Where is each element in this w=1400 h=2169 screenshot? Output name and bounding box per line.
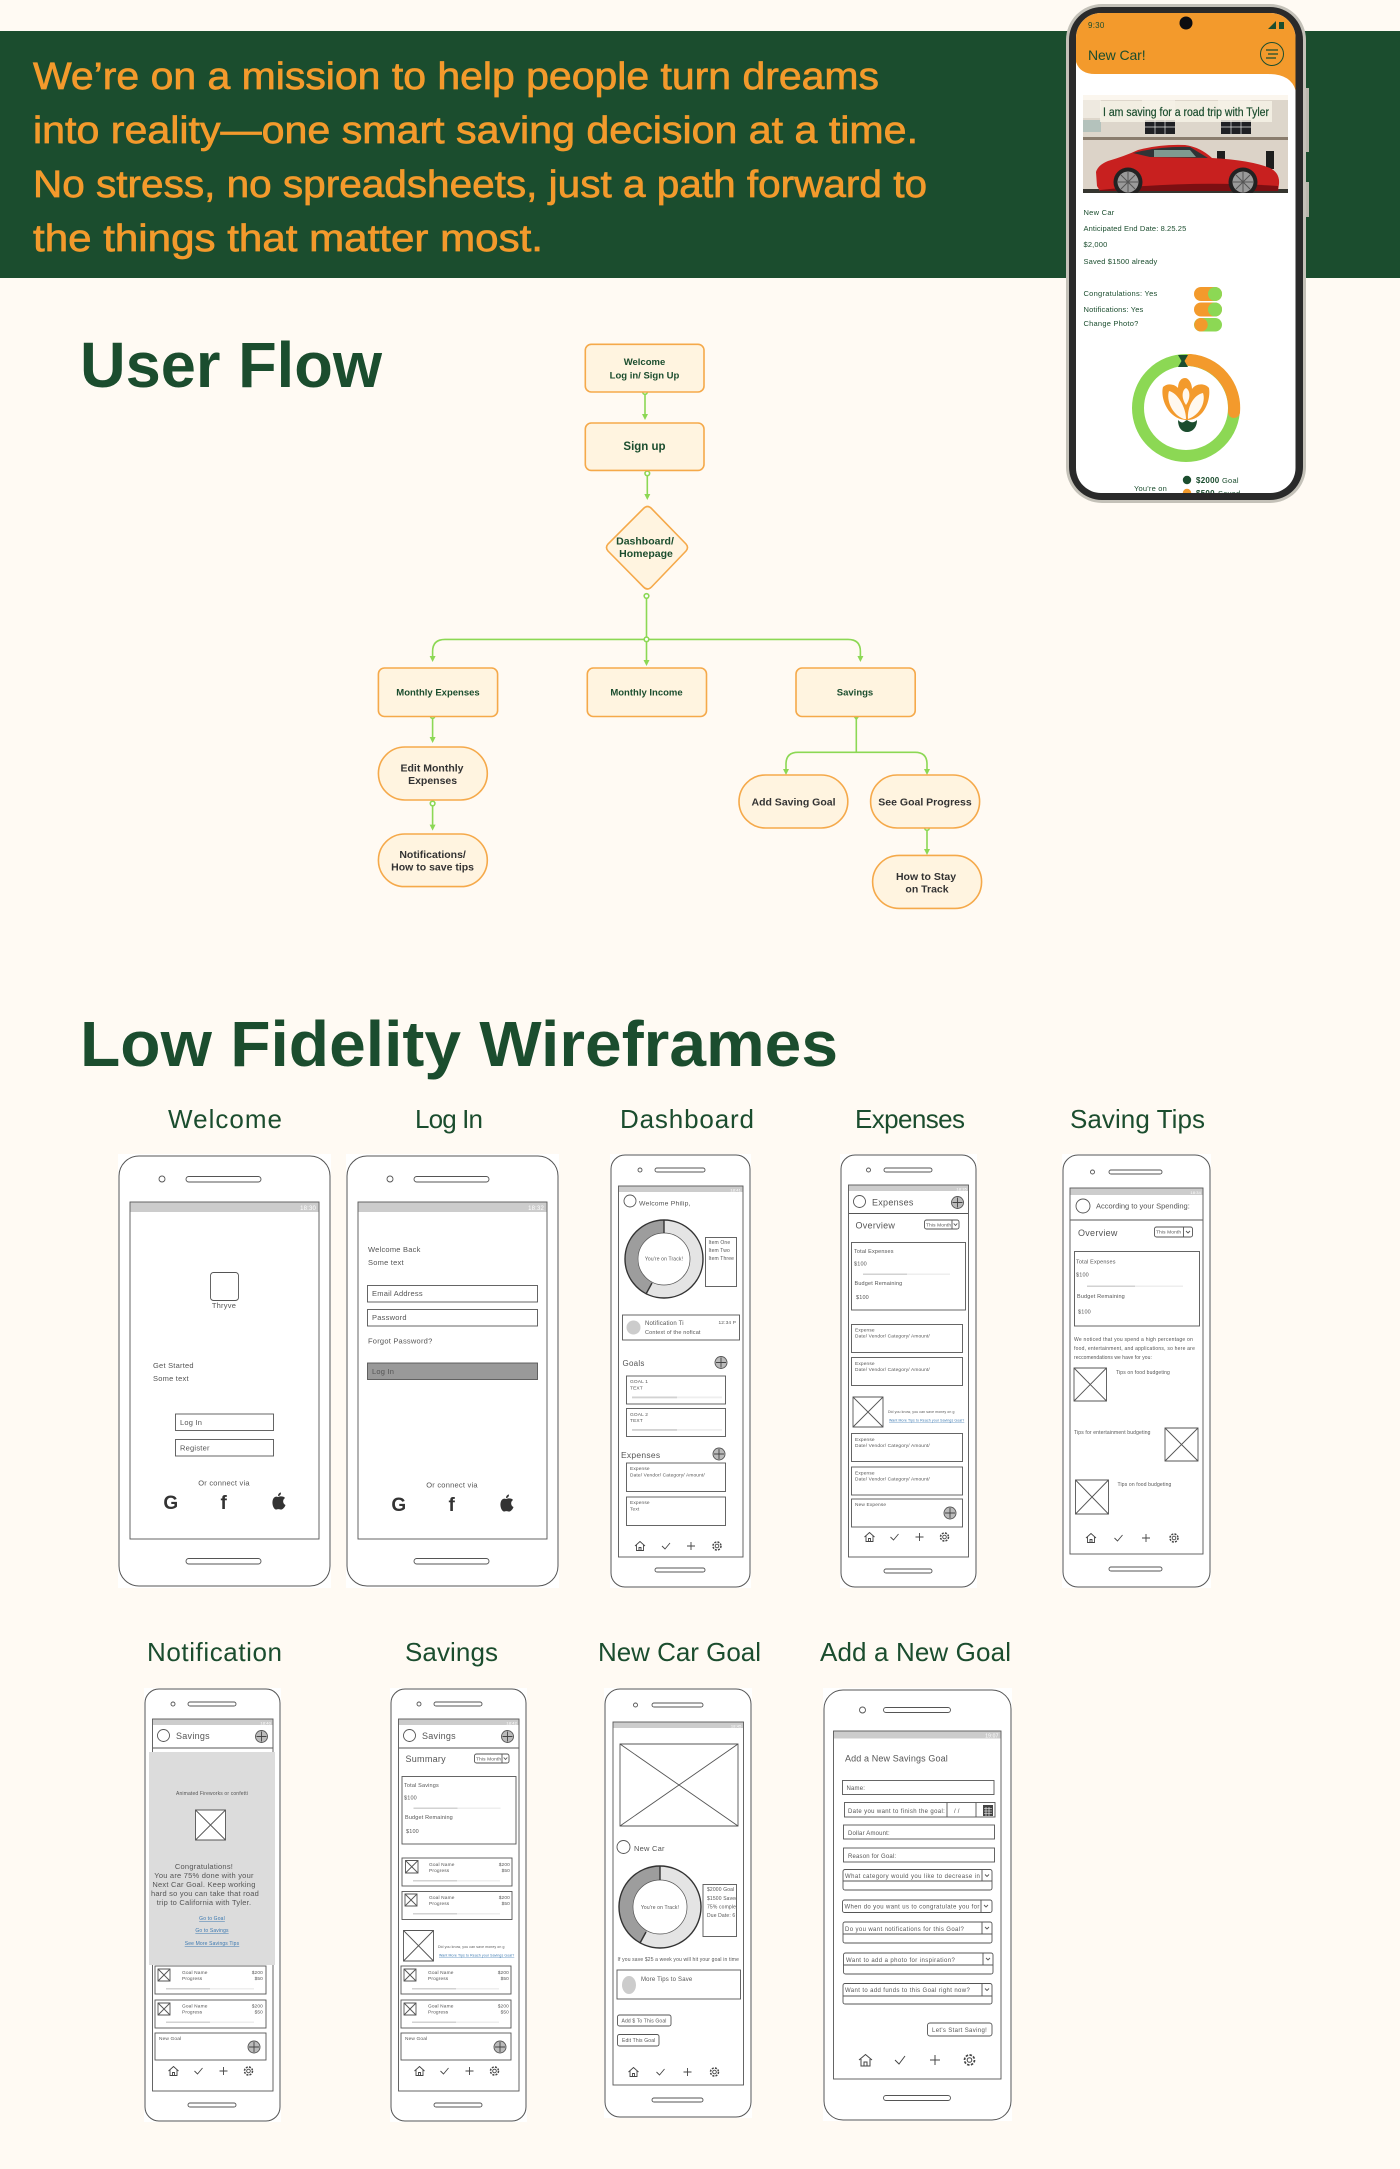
social login: Or connect via xyxy=(198,1478,250,1488)
app header: New Car! xyxy=(1088,47,1146,63)
recommendation paragraph xyxy=(1074,1337,1195,1361)
tip with image placeholder xyxy=(853,1397,964,1427)
heading: low fidelity wireframes: Low Fidelity Wireframes xyxy=(80,1008,838,1080)
wireframe: log in xyxy=(346,1154,559,1588)
wireframe: saving tips xyxy=(1062,1154,1211,1588)
wireframe labels row 1: Log In xyxy=(415,1104,483,1134)
wireframe: notification: 18:40 xyxy=(260,1720,272,1726)
more goal rows: $200 xyxy=(498,1970,509,1976)
intro text: Some text xyxy=(153,1374,189,1383)
social login: G xyxy=(163,1493,179,1514)
congratulations overlay: trip to California with Tyler. xyxy=(157,1898,251,1907)
goal rows: Goal Name xyxy=(182,2004,208,2010)
social login: Or connect via xyxy=(426,1480,478,1490)
select: notifications: Do you want notifications for this Goal? xyxy=(845,1927,964,1933)
node: how to stay on track: on Track xyxy=(905,884,949,896)
more expense rows: Date/ Vendor/ Category/ Amount/ xyxy=(855,1443,930,1449)
field: reason xyxy=(844,1848,994,1862)
mission statement xyxy=(33,56,927,260)
toggles xyxy=(1194,287,1222,332)
goal name: New Car xyxy=(634,1844,665,1853)
email field: Email Address xyxy=(372,1289,423,1298)
social login: f xyxy=(449,1495,456,1516)
overview row: This Month xyxy=(926,1222,951,1228)
goal rows: $50 xyxy=(502,1901,510,1907)
goal details: Saved $1500 already xyxy=(1084,257,1158,266)
goal details xyxy=(1084,208,1186,328)
donut legend: Due Date: 6 xyxy=(707,1913,735,1919)
bottom nav xyxy=(168,2066,252,2076)
more expense rows: Date/ Vendor/ Category/ Amount/ xyxy=(855,1476,930,1482)
more goal rows: $200 xyxy=(498,2004,509,2010)
node: savings xyxy=(796,668,915,716)
donut legend xyxy=(706,1238,736,1286)
greeting: Welcome Philip, xyxy=(639,1200,691,1208)
total panel: $100 xyxy=(1076,1272,1089,1278)
goal cards xyxy=(626,1376,726,1436)
wireframe labels row 1: Saving Tips xyxy=(1070,1104,1205,1134)
new goal row xyxy=(155,2033,266,2060)
node: see goal progress xyxy=(871,775,980,828)
wireframe labels row 1: Expenses xyxy=(855,1104,965,1134)
total panel: Total Expenses xyxy=(1076,1260,1116,1266)
tip: food budgeting again xyxy=(1076,1480,1172,1514)
select: notifications xyxy=(843,1922,992,1943)
wireframe: add a new goal xyxy=(823,1688,1012,2121)
header xyxy=(1070,1199,1202,1220)
goal rows: Progress xyxy=(182,1976,203,1982)
progress donut xyxy=(619,1866,701,1948)
donut legend: 75% completed xyxy=(707,1904,743,1910)
select: category: What category would you like to decrease in xyxy=(845,1874,980,1880)
select: photo xyxy=(844,1953,993,1974)
mission statement: We’re on a mission to help people turn dreams xyxy=(33,56,879,98)
log in button: Log In xyxy=(180,1418,202,1427)
goal rows: $50 xyxy=(502,1868,510,1874)
new goal row: New Goal xyxy=(405,2036,427,2042)
register button: Register xyxy=(180,1444,210,1452)
node: monthly expenses: Monthly Expenses xyxy=(396,688,480,698)
wireframe: dashboard xyxy=(610,1154,751,1588)
red car xyxy=(1096,145,1279,196)
goal rows: $50 xyxy=(255,2010,263,2016)
expense rows: Expense xyxy=(855,1361,875,1367)
goal cards: GOAL 1 xyxy=(630,1379,648,1385)
donut legend: $500 xyxy=(1196,489,1215,498)
donut legend: Goal xyxy=(1222,476,1239,485)
bottom nav xyxy=(628,2068,718,2076)
congratulations overlay: You are 75% done with your xyxy=(154,1871,254,1880)
total panel: $100 xyxy=(1078,1310,1091,1316)
expense rows: Expense xyxy=(855,1328,875,1334)
congratulations overlay: Congratulations! xyxy=(175,1862,233,1871)
total panel: $100 xyxy=(856,1295,869,1301)
heading: user flow: User Flow xyxy=(80,329,382,401)
header xyxy=(849,1196,968,1214)
tip: entertainment budgeting: Tips for entertainment budgeting xyxy=(1074,1430,1151,1436)
node: sign up xyxy=(585,423,704,470)
node: how to stay on track xyxy=(873,855,982,908)
bottom nav xyxy=(414,2066,498,2076)
goal cards: TEXT xyxy=(630,1418,643,1424)
tips card: More Tips to Save xyxy=(641,1977,693,1983)
overview row xyxy=(856,1220,959,1230)
password field: Password xyxy=(372,1313,407,1322)
goal rows: Progress xyxy=(429,1901,450,1907)
node: welcome xyxy=(585,344,704,392)
donut legend xyxy=(1134,476,1240,493)
wireframe labels row 2: Notification xyxy=(147,1637,282,1667)
node: monthly expenses xyxy=(378,668,498,716)
overview row: This Month xyxy=(1156,1230,1181,1236)
select: congratulate xyxy=(842,1900,992,1912)
wireframe labels row 1: Welcome xyxy=(168,1104,282,1134)
node: edit monthly expenses xyxy=(378,747,487,800)
wireframe labels row 2: New Car Goal xyxy=(598,1637,761,1667)
goal rows: $200 xyxy=(499,1862,510,1868)
total panel: Budget Remaining xyxy=(1077,1294,1125,1300)
mission statement: the things that matter most. xyxy=(33,218,543,260)
node: monthly income: Monthly Income xyxy=(610,688,683,698)
tips card xyxy=(617,1970,740,1999)
wireframe: dashboard: 18:41 xyxy=(730,1188,742,1192)
user flow diagram xyxy=(378,344,982,908)
node: savings: Savings xyxy=(837,688,873,698)
more goal rows: $50 xyxy=(501,2010,509,2016)
node: edit monthly expenses: Edit Monthly xyxy=(400,762,464,774)
summary row: This Month xyxy=(476,1756,501,1762)
congratulations overlay: See More Savings Tips xyxy=(185,1941,240,1947)
greeting: Welcome Back xyxy=(368,1245,421,1254)
app header: 9:30 xyxy=(1088,21,1105,30)
expense cards xyxy=(626,1463,726,1526)
add funds button: Add $ To This Goal xyxy=(622,2018,667,2024)
goal cards: GOAL 2 xyxy=(630,1412,648,1418)
notification card: 12:34 P xyxy=(718,1320,736,1326)
greeting: Some text xyxy=(368,1258,404,1267)
wireframe labels row 1 xyxy=(168,1104,1205,1134)
tip: food budgeting xyxy=(1074,1368,1170,1401)
node: welcome: Welcome xyxy=(624,357,665,368)
goal details: Change Photo? xyxy=(1084,319,1138,328)
total panel xyxy=(1074,1252,1200,1326)
node: sign up: Sign up xyxy=(623,441,666,453)
goal rows: Goal Name xyxy=(429,1862,455,1868)
total panel: $100 xyxy=(406,1829,419,1835)
wireframe: welcome xyxy=(118,1154,331,1588)
select: photo: Want to add a photo for inspiration? xyxy=(846,1958,955,1964)
mission statement: into reality—one smart saving decision at a time. xyxy=(33,110,918,152)
field: dollar amount: Dollar Amount: xyxy=(848,1831,890,1837)
node: notifications: How to save tips xyxy=(391,862,474,874)
select: funds xyxy=(843,1984,992,2004)
wireframe: expenses xyxy=(840,1154,977,1588)
log in button xyxy=(176,1414,274,1430)
wireframe: savings: 18:42 xyxy=(506,1720,518,1726)
more goal rows xyxy=(401,1966,511,2028)
recommendation paragraph: We noticed that you spend a high percentage on xyxy=(1074,1337,1193,1343)
greeting xyxy=(368,1245,421,1267)
goal rows xyxy=(402,1858,512,1920)
header: Expenses xyxy=(872,1198,914,1208)
app header xyxy=(1076,13,1296,92)
wireframe: expenses: 18:35 xyxy=(956,1186,968,1192)
tip with image placeholder: Did you know, you can save money on g xyxy=(438,1945,505,1949)
donut legend: $2000 xyxy=(1196,476,1220,485)
goal rows: $200 xyxy=(252,1970,263,1976)
wireframe: welcome: 18:30 xyxy=(300,1206,316,1212)
donut legend: $1500 Saved xyxy=(707,1896,738,1902)
wireframe labels row 2: Savings xyxy=(405,1637,498,1667)
tip with image placeholder: Want More Tips to Reach your Savings Goal? xyxy=(889,1418,964,1422)
bottom nav xyxy=(635,1542,721,1550)
wireframe: add a new goal: 19:07 xyxy=(985,1734,999,1740)
goal rows: Progress xyxy=(182,2010,203,2016)
log in button: Log In xyxy=(372,1367,394,1376)
select: congratulate: When do you want us to congratulate you for xyxy=(844,1904,980,1910)
more goal rows: Progress xyxy=(428,1976,449,1982)
wireframe: new car goal xyxy=(604,1688,752,2118)
progress donut: You're on Track! xyxy=(641,1905,679,1911)
congratulations overlay: Next Car Goal. Keep working xyxy=(152,1880,256,1889)
tip with image placeholder: Want More Tips to Reach your Savings Goal? xyxy=(439,1954,514,1958)
tip: entertainment budgeting xyxy=(1074,1428,1198,1461)
field: name xyxy=(842,1780,994,1794)
field: date: / / xyxy=(954,1809,960,1815)
more expense rows xyxy=(852,1434,962,1495)
select: funds: Want to add funds to this Goal right now? xyxy=(845,1988,970,1994)
wireframe labels row 1: Dashboard xyxy=(620,1104,754,1134)
summary row: Summary xyxy=(406,1754,446,1764)
header: Savings xyxy=(422,1731,456,1741)
node: dashboard: Homepage xyxy=(619,548,673,560)
progress donut xyxy=(625,1220,703,1298)
goal rows: $200 xyxy=(252,2004,263,2010)
overview row: Overview xyxy=(1078,1228,1118,1238)
goal details: Notifications: Yes xyxy=(1084,305,1144,314)
goal rows: $50 xyxy=(255,1976,263,1982)
log in button xyxy=(368,1363,538,1380)
new expense row: New Expense xyxy=(855,1502,886,1508)
recommendation paragraph: food, entertainment, and applications, so here are xyxy=(1074,1346,1195,1352)
donut legend: $2000 Goal xyxy=(707,1887,734,1893)
goal details: $2,000 xyxy=(1084,240,1108,249)
tip with image placeholder: Did you know, you can save money on g xyxy=(888,1410,955,1414)
field: dollar amount xyxy=(844,1825,994,1839)
congratulations overlay: hard so you can take that road xyxy=(151,1889,259,1898)
mission statement: No stress, no spreadsheets, just a path forward to xyxy=(33,164,927,206)
bottom nav xyxy=(864,1532,948,1542)
node: add saving goal xyxy=(739,775,848,828)
connectors xyxy=(430,390,930,855)
expense rows: Date/ Vendor/ Category/ Amount/ xyxy=(855,1334,930,1340)
logo placeholder: Thryve xyxy=(212,1301,236,1310)
progress donut: You're on Track! xyxy=(645,1256,683,1262)
congratulations overlay: Animated Fireworks or confetti xyxy=(176,1791,248,1797)
goal rows: Goal Name xyxy=(429,1895,455,1901)
total panel xyxy=(852,1242,966,1310)
goals heading: Goals xyxy=(622,1359,645,1368)
new goal row xyxy=(401,2033,511,2060)
goals heading xyxy=(622,1356,727,1368)
notification card xyxy=(622,1315,740,1340)
expense cards: Text xyxy=(630,1506,640,1512)
expense rows xyxy=(852,1324,962,1386)
goal rows: Goal Name xyxy=(182,1970,208,1976)
email field xyxy=(368,1286,538,1302)
new expense row xyxy=(852,1499,962,1527)
total panel: Budget Remaining xyxy=(405,1815,453,1821)
goal details: Congratulations: Yes xyxy=(1084,289,1158,298)
total panel: Budget Remaining xyxy=(854,1281,902,1287)
notification card: Context of the noficat xyxy=(645,1330,701,1336)
node: see goal progress: See Goal Progress xyxy=(878,796,972,808)
add funds button xyxy=(618,2015,671,2026)
goal details: New Car xyxy=(1084,208,1115,217)
expenses heading: Expenses xyxy=(621,1450,660,1460)
tip: food budgeting again: Tips on food budgeting xyxy=(1118,1482,1172,1488)
goal rows: Progress xyxy=(429,1868,450,1874)
goal name xyxy=(617,1840,665,1854)
wireframe: saving tips: 18:34 xyxy=(1190,1190,1202,1195)
tip with image placeholder xyxy=(404,1930,514,1961)
edit goal button: Edit This Goal xyxy=(622,2038,655,2044)
total panel: $100 xyxy=(854,1262,867,1268)
mission banner xyxy=(0,31,1400,278)
social login xyxy=(391,1480,514,1516)
social login: f xyxy=(221,1493,228,1514)
progress donut with logo xyxy=(1138,355,1234,456)
goal rows: $200 xyxy=(499,1895,510,1901)
donut legend xyxy=(702,1884,737,1937)
password field xyxy=(368,1310,538,1326)
car photo xyxy=(1083,95,1288,196)
node: dashboard xyxy=(606,506,688,589)
register button xyxy=(176,1440,274,1456)
social login xyxy=(163,1478,286,1514)
header: According to your Spending: xyxy=(1096,1202,1190,1210)
form title: Add a New Savings Goal xyxy=(845,1754,948,1764)
total panel: Total Savings xyxy=(404,1783,439,1789)
wireframe: savings xyxy=(390,1688,527,2122)
new goal row: New Goal xyxy=(159,2036,181,2042)
more expense rows: Expense xyxy=(855,1470,875,1476)
more goal rows: $50 xyxy=(501,1976,509,1982)
edit goal button xyxy=(618,2034,659,2046)
recommendation paragraph: reccomendations we have for you: xyxy=(1074,1355,1152,1361)
more goal rows: Progress xyxy=(428,2010,449,2016)
total panel xyxy=(402,1776,516,1844)
node: dashboard: Dashboard/ xyxy=(616,536,674,548)
field: date xyxy=(844,1802,995,1817)
forgot password: Forgot Password? xyxy=(368,1336,432,1346)
expense cards: Expense xyxy=(630,1500,650,1506)
node: add saving goal: Add Saving Goal xyxy=(751,796,836,808)
node: notifications: Notifications/ xyxy=(399,849,466,861)
header xyxy=(399,1730,518,1748)
submit button: Let's Start Saving! xyxy=(932,2028,987,2034)
notification card: Notification Ti xyxy=(645,1321,684,1327)
header: Savings xyxy=(176,1731,210,1741)
donut legend: Saved xyxy=(1218,489,1240,498)
donut legend: Item Two xyxy=(708,1248,730,1254)
goal details: Anticipated End Date: 8.25.25 xyxy=(1084,224,1186,233)
bottom nav xyxy=(1086,1534,1178,1542)
submit button xyxy=(928,2023,992,2036)
goal cards: TEXT xyxy=(630,1386,643,1392)
field: reason: Reason for Goal: xyxy=(848,1854,896,1860)
more expense rows: Expense xyxy=(855,1437,875,1443)
goal image placeholder xyxy=(620,1744,738,1826)
goal rows xyxy=(155,1966,266,2028)
node: notifications xyxy=(378,834,487,887)
expense rows: Date/ Vendor/ Category/ Amount/ xyxy=(855,1367,930,1373)
wireframe: new car goal: 18:45 xyxy=(731,1724,742,1728)
donut legend: You're on xyxy=(1134,484,1167,493)
more goal rows: Goal Name xyxy=(428,2004,454,2010)
congratulations overlay: Go to Goal xyxy=(199,1916,225,1922)
wireframe labels row 2: Add a New Goal xyxy=(820,1637,1011,1667)
total panel: Total Expenses xyxy=(854,1249,894,1255)
node: monthly income xyxy=(587,668,706,716)
bottom nav xyxy=(859,2054,974,2066)
expense cards: Date/ Vendor/ Category/ Amount/ xyxy=(630,1472,705,1478)
hero phone mockup xyxy=(1066,4,1309,503)
donut legend: Item One xyxy=(708,1240,730,1246)
node: welcome: Log in/ Sign Up xyxy=(610,370,680,382)
wireframe: log in: 18:32 xyxy=(528,1206,544,1212)
total panel: $100 xyxy=(404,1796,417,1802)
intro text xyxy=(153,1361,194,1383)
expense cards: Expense xyxy=(630,1466,650,1472)
savings hint: If you save $25 a week you will hit your goal in time xyxy=(618,1957,739,1963)
wireframe labels row 2 xyxy=(147,1637,1011,1667)
more goal rows: Goal Name xyxy=(428,1970,454,1976)
logo placeholder xyxy=(210,1272,238,1310)
summary row xyxy=(406,1754,509,1764)
wireframe: notification xyxy=(144,1688,281,2122)
greeting xyxy=(624,1195,691,1208)
overview row: Overview xyxy=(856,1220,895,1230)
tip: food budgeting: Tips on food budgeting xyxy=(1116,1370,1170,1376)
node: how to stay on track: How to Stay xyxy=(896,871,956,883)
header xyxy=(153,1730,272,1748)
camera xyxy=(1180,16,1192,30)
overview row xyxy=(1078,1227,1192,1238)
select: category xyxy=(843,1870,992,1890)
field: name: Name: xyxy=(846,1786,865,1792)
congratulations overlay xyxy=(149,1752,275,1965)
expenses heading xyxy=(621,1448,725,1460)
social login: G xyxy=(391,1495,407,1516)
congratulations overlay: Go to Savings xyxy=(195,1928,229,1934)
field: date: Date you want to finish the goal: xyxy=(848,1809,945,1815)
intro text: Get Started xyxy=(153,1361,194,1370)
node: edit monthly expenses: Expenses xyxy=(408,775,457,787)
donut legend: Item Three xyxy=(708,1256,734,1262)
photo caption: I am saving for a road trip with Tyler xyxy=(1103,107,1269,119)
